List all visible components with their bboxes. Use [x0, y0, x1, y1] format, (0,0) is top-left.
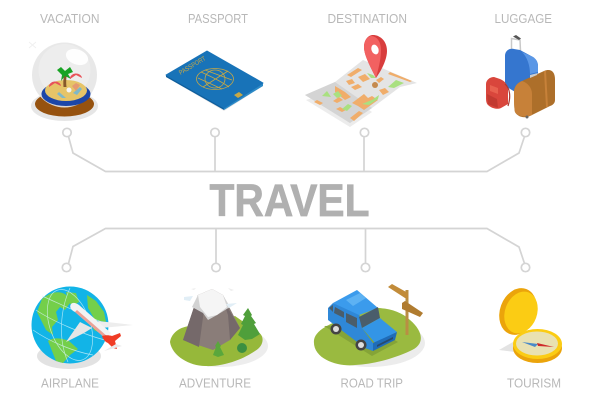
- label: vacation: VACATION: [40, 12, 100, 26]
- label: road trip: ROAD TRIP: [340, 376, 403, 390]
- icon: globe and airplane: [32, 283, 133, 369]
- label: adventure: ADVENTURE: [179, 376, 251, 390]
- label: passport: PASSPORT: [188, 12, 248, 26]
- connector lines: bottom: [62, 228, 530, 272]
- icon: mountain: [170, 288, 268, 367]
- icon: map with pin: [305, 35, 417, 127]
- label: luggage: LUGGAGE: [494, 12, 552, 26]
- icon: car on island with signpost: [314, 284, 425, 367]
- icon: passport: PASSPORT: [178, 55, 207, 77]
- icon: snow globe: [29, 42, 98, 121]
- label: destination: DESTINATION: [328, 12, 407, 26]
- label: tourism: TOURISM: [507, 376, 561, 390]
- label: airplane: AIRPLANE: [41, 376, 99, 390]
- connector lines: top: [63, 128, 530, 172]
- title: TRAVEL: [210, 175, 370, 226]
- icon: passport: [166, 51, 263, 111]
- icon: compass: [493, 283, 562, 363]
- icon: luggage: [486, 35, 555, 118]
